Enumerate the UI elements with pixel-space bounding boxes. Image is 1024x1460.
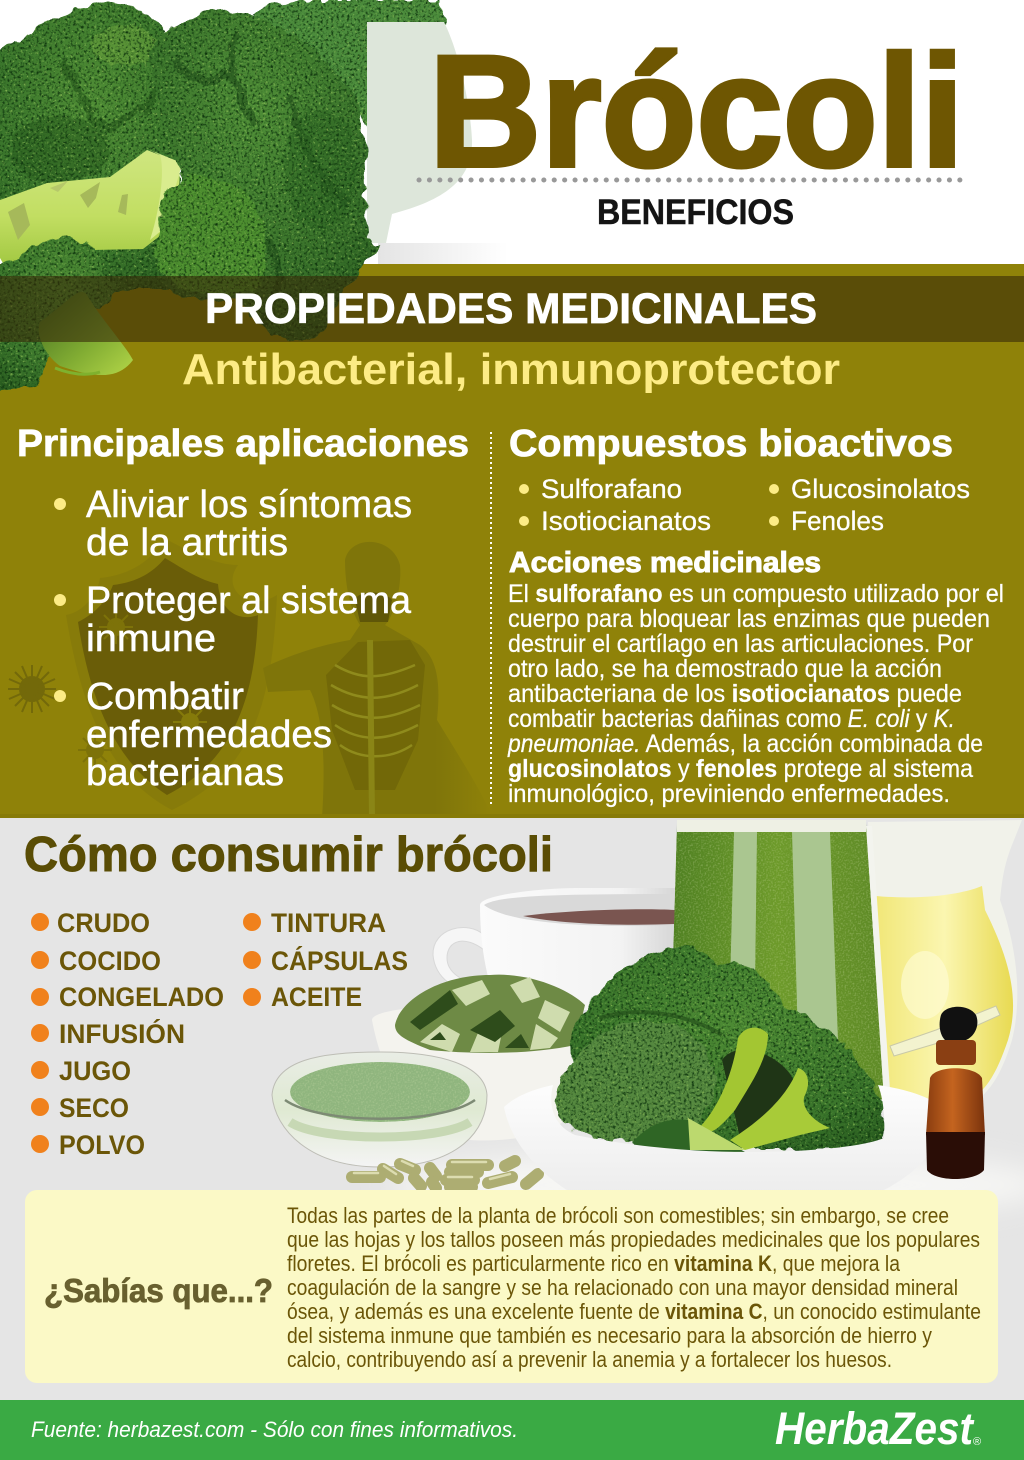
- green juice glass: [670, 820, 890, 1100]
- right head: [148, 11, 381, 341]
- form labels: ACEITE: [271, 982, 362, 1012]
- photo: main broccoli: [0, 3, 381, 392]
- compound list: [541, 474, 970, 536]
- crevice between heads: [600, 1012, 722, 1035]
- oil jug: [868, 820, 1022, 1110]
- form labels: COCIDO: [59, 946, 161, 976]
- panel: compuestos bioactivos: [507, 423, 1004, 808]
- acciones paragraph: antibacteriana de los isotiocianatos puede: [508, 680, 962, 708]
- viruses: [8, 610, 207, 767]
- form labels: JUGO: [59, 1056, 131, 1086]
- dropper bottle: [890, 1006, 1000, 1179]
- panel: como consumir background: [0, 818, 1024, 1400]
- soft light under products: [390, 1150, 1024, 1220]
- capsules: [352, 1161, 538, 1188]
- footer bar: [0, 1400, 1024, 1460]
- heading: propiedades medicinales: PROPIEDADES MEDICINALES: [205, 285, 817, 333]
- callout heading: ¿Sabías que...?: [44, 1272, 273, 1309]
- acciones paragraph: otro lado, se ha demostrado que la acción: [508, 655, 942, 683]
- dotted divider under the title: [419, 178, 960, 182]
- form labels: CONGELADO: [59, 982, 224, 1012]
- stems: [700, 1028, 768, 1132]
- form labels: TINTURA: [271, 908, 386, 938]
- left floret: [555, 1020, 716, 1142]
- application list: de la artritis: [86, 522, 288, 564]
- logo: HerbaZest: [775, 1403, 975, 1454]
- application list: Aliviar los síntomas: [86, 484, 412, 526]
- title: Brócoli: [429, 22, 964, 200]
- small floret: [0, 237, 120, 392]
- stump: [632, 1120, 745, 1152]
- application list: bacterianas: [86, 752, 284, 794]
- callout text: ósea, y además es una excelente fuente de vitamina C, un conocido estimulante: [287, 1299, 981, 1324]
- upper head: [570, 946, 885, 1150]
- compound list: Glucosinolatos: [791, 474, 970, 504]
- form labels: INFUSIÓN: [59, 1018, 185, 1049]
- subtitle: BENEFICIOS: [597, 193, 794, 232]
- form labels: [57, 908, 408, 1160]
- form labels: CRUDO: [57, 908, 150, 938]
- callout text: del sistema inmune que también es necesario para la absorción de hierro y: [287, 1323, 932, 1348]
- acciones paragraph: cuerpo para bloquear las enzimas que pueden: [508, 605, 990, 633]
- background figure: shield and human body: [8, 537, 492, 818]
- bowl of dried broccoli: [372, 975, 590, 1140]
- callout text: floretes. El brócoli es particularmente rico en vitamina K, que mejora la: [287, 1251, 901, 1276]
- acciones paragraph: glucosinolatos y fenoles protege al sistema: [508, 755, 973, 783]
- heading: Principales aplicaciones: [17, 423, 469, 465]
- application list: Proteger al sistema: [86, 580, 412, 622]
- acciones paragraph: El sulforafano es un compuesto utilizado por el: [508, 580, 1004, 608]
- subheading: antibacterial: Antibacterial, inmunoprotector: [182, 345, 840, 394]
- photo: product still life: [272, 820, 1024, 1220]
- callout text: calcio, contribuyendo así a prevenir la anemia y a fortalecer los huesos.: [287, 1347, 892, 1372]
- left head: [0, 3, 180, 290]
- compound bullets: [519, 484, 779, 526]
- callout text: [287, 1203, 981, 1372]
- compound list: Isotiocianatos: [541, 506, 711, 536]
- olive main panel: [0, 264, 1024, 818]
- glass bowl with powder: [272, 1052, 487, 1167]
- photo: background broccoli: [250, 0, 472, 243]
- source note: Fuente: herbazest.com - Sólo con fines informativos.: [31, 1417, 518, 1442]
- application list: inmune: [86, 618, 216, 660]
- stem: [0, 150, 180, 270]
- application list: [86, 484, 412, 794]
- big white bowl front: [504, 1085, 948, 1192]
- acciones heading: Acciones medicinales: [509, 547, 821, 579]
- band: dark propiedades overlay: [0, 276, 1024, 342]
- body: [266, 542, 464, 814]
- list: consumption forms: [31, 908, 408, 1160]
- acciones paragraph: combatir bacterias dañinas como E. coli y K.: [508, 705, 955, 733]
- panel: principales aplicaciones: [17, 423, 469, 794]
- dark hollow: [722, 1050, 795, 1138]
- heading: como consumir: Cómo consumir brócoli: [24, 828, 553, 882]
- application list: enfermedades: [86, 714, 332, 756]
- heading: Compuestos bioactivos: [509, 423, 953, 465]
- callout: sabias que: [25, 1190, 998, 1383]
- acciones paragraph: destruir el cartílago en las articulaciones. Por: [508, 630, 973, 658]
- application list: Combatir: [86, 676, 244, 718]
- form labels: SECO: [59, 1093, 129, 1123]
- shield: [66, 537, 277, 810]
- orange bullets: [31, 913, 261, 1153]
- acciones paragraph: [507, 580, 1004, 808]
- compound list: Fenoles: [791, 506, 884, 536]
- form labels: POLVO: [59, 1130, 145, 1160]
- tea cup: [433, 888, 680, 1010]
- form labels: CÁPSULAS: [271, 945, 408, 976]
- registered mark: ®: [973, 1436, 981, 1448]
- acciones paragraph: inmunológico, previniendo enfermedades.: [508, 780, 950, 808]
- compound list: Sulforafano: [541, 474, 682, 504]
- bullets: [54, 498, 66, 702]
- fresh broccoli: [555, 946, 885, 1152]
- acciones paragraph: pneumoniae. Además, la acción combinada de: [507, 730, 983, 758]
